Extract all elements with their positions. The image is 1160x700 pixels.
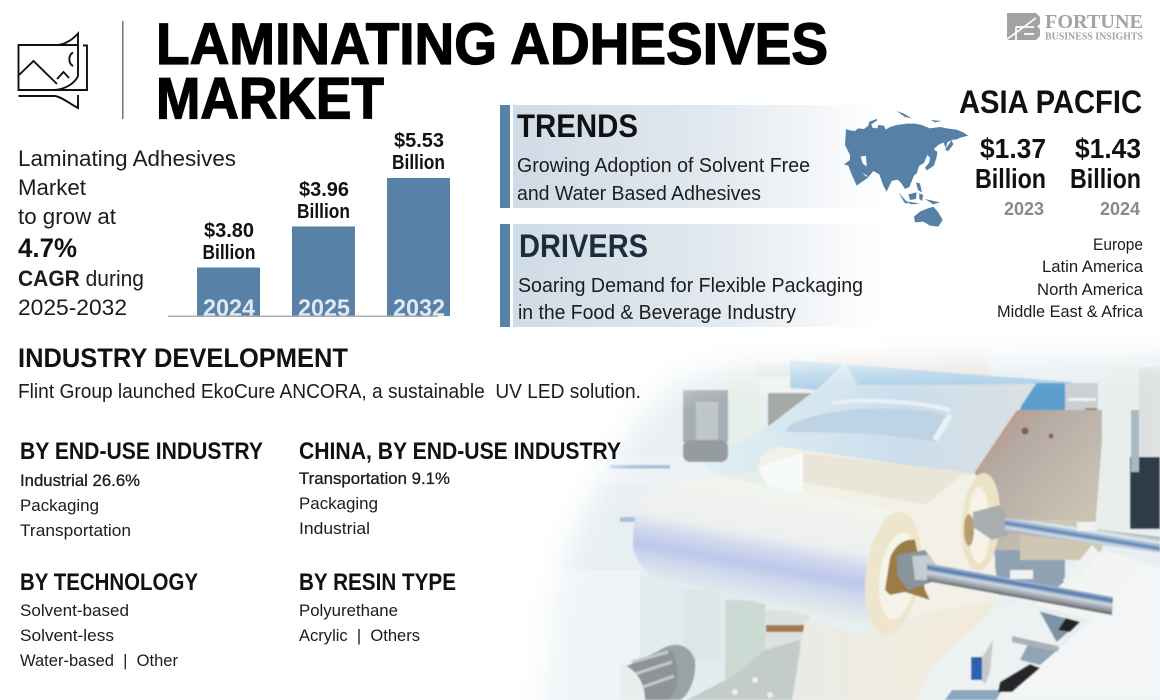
stat: 2024 value: $1.43 xyxy=(1075,133,1141,164)
photo: laminating film rollers xyxy=(548,352,1160,700)
section: industry development: Flint Group launched EkoCure ANCORA, a sustainable UV LED solution. xyxy=(18,381,641,403)
film sheet xyxy=(702,364,1036,474)
bar 2025: $3.96 xyxy=(299,179,349,201)
list: other regions: Europe xyxy=(1093,236,1143,254)
bar 2025 xyxy=(292,179,355,322)
top band xyxy=(882,362,990,375)
segment: China by end-use industry: CHINA, BY END-USE INDUSTRY xyxy=(299,438,621,465)
bar 2025: Billion xyxy=(297,201,350,223)
panel: trends: Growing Adoption of Solvent Free xyxy=(517,155,810,177)
title: MARKET xyxy=(156,66,384,132)
segment: China by end-use industry: Packaging xyxy=(299,494,378,513)
segment: by end-use industry: Transportation xyxy=(20,521,131,540)
right pillar and dark panel xyxy=(1095,446,1102,530)
left pillar and window xyxy=(728,474,730,478)
bar 2024: Billion xyxy=(202,242,256,264)
list: other regions xyxy=(997,236,1144,321)
segment: by end-use industry xyxy=(20,438,263,540)
segment: by technology: Solvent-based xyxy=(20,601,129,620)
segment: by technology: Water-based | Other xyxy=(20,651,178,670)
heading: Asia Pacific: ASIA PACFIC xyxy=(959,84,1142,120)
front shaft xyxy=(927,563,1113,615)
section: industry development: INDUSTRY DEVELOPMENT xyxy=(18,343,348,373)
CAGR text block: 4.7% xyxy=(18,233,77,263)
list: other regions: Middle East & Africa xyxy=(997,303,1144,321)
logo: Fortune Business Insights xyxy=(1006,11,1143,42)
list: other regions: North America xyxy=(1037,281,1144,299)
stat: 2024 value xyxy=(1070,133,1141,219)
bar 2024 xyxy=(197,220,260,322)
icon: laminated film image xyxy=(18,34,87,108)
lower stand xyxy=(682,590,810,700)
bar 2032: $5.53 xyxy=(394,130,444,152)
CAGR text block: Laminating Adhesives xyxy=(18,146,236,171)
bottom left motor xyxy=(620,645,695,700)
back shaft xyxy=(1005,518,1160,553)
bar 2032: Billion xyxy=(392,152,445,174)
CAGR text block: 2025-2032 xyxy=(18,295,127,320)
CAGR text block xyxy=(18,146,236,320)
stat: 2024 value: Billion xyxy=(1070,163,1141,194)
map: Asia Pacific xyxy=(844,111,968,227)
back roll xyxy=(758,447,1008,620)
panel: trends: TRENDS xyxy=(517,108,638,144)
segment: China by end-use industry: Industrial xyxy=(299,519,370,538)
segment: China by end-use industry xyxy=(299,438,621,538)
stat: 2023 value xyxy=(975,133,1046,219)
panel: drivers: in the Food & Beverage Industry xyxy=(518,302,796,324)
bar chart: market size xyxy=(168,130,450,322)
segment: China by end-use industry: Transportation 9.1% xyxy=(299,469,450,488)
segment: by resin type: BY RESIN TYPE xyxy=(299,569,456,596)
white machine body xyxy=(917,545,1160,700)
front roll xyxy=(633,477,936,638)
brown wall xyxy=(975,410,1102,555)
segment: by resin type: Polyurethane xyxy=(299,601,398,620)
title xyxy=(156,12,828,132)
CAGR text block: to grow at xyxy=(18,204,116,229)
panel: drivers: Soaring Demand for Flexible Packaging xyxy=(518,275,863,297)
segment: by resin type xyxy=(299,569,456,645)
segment: by technology: Solvent-less xyxy=(20,626,114,645)
bar 2024: 2024 xyxy=(203,295,256,322)
panel: trends: and Water Based Adhesives xyxy=(517,183,761,205)
segment: by technology: BY TECHNOLOGY xyxy=(20,569,198,596)
bar 2032: 2032 xyxy=(393,295,445,322)
bar 2025: 2025 xyxy=(298,295,350,322)
stat: 2023 value: Billion xyxy=(975,163,1046,194)
bar 2032 xyxy=(387,130,450,322)
stat: 2024 value: 2024 xyxy=(1100,199,1140,219)
segment: by resin type: Acrylic | Others xyxy=(299,626,420,645)
list: other regions: Latin America xyxy=(1042,258,1144,276)
CAGR text block: CAGR during xyxy=(18,266,144,291)
stat: 2023 value: 2023 xyxy=(1004,199,1044,219)
segment: by end-use industry: Packaging xyxy=(20,496,99,515)
panel: drivers: DRIVERS xyxy=(519,228,648,264)
logo: Fortune Business Insights: FORTUNE xyxy=(1045,11,1143,33)
top motor xyxy=(683,390,728,462)
panel: trends xyxy=(500,105,883,208)
cream paper xyxy=(792,601,994,700)
logo: Fortune Business Insights: BUSINESS INSIGHTS xyxy=(1045,32,1143,42)
section: industry development xyxy=(18,343,641,403)
segment: by end-use industry: BY END-USE INDUSTRY xyxy=(20,438,263,465)
stat: 2023 value: $1.37 xyxy=(980,133,1046,164)
header divider xyxy=(122,21,124,119)
title: LAMINATING ADHESIVES xyxy=(156,12,828,77)
panel: drivers xyxy=(500,224,883,327)
CAGR text block: Market xyxy=(18,175,86,200)
segment: by technology xyxy=(20,569,198,670)
bar 2024: $3.80 xyxy=(204,220,254,242)
segment: by end-use industry: Industrial 26.6% xyxy=(20,471,140,490)
blue roller xyxy=(790,360,1072,412)
